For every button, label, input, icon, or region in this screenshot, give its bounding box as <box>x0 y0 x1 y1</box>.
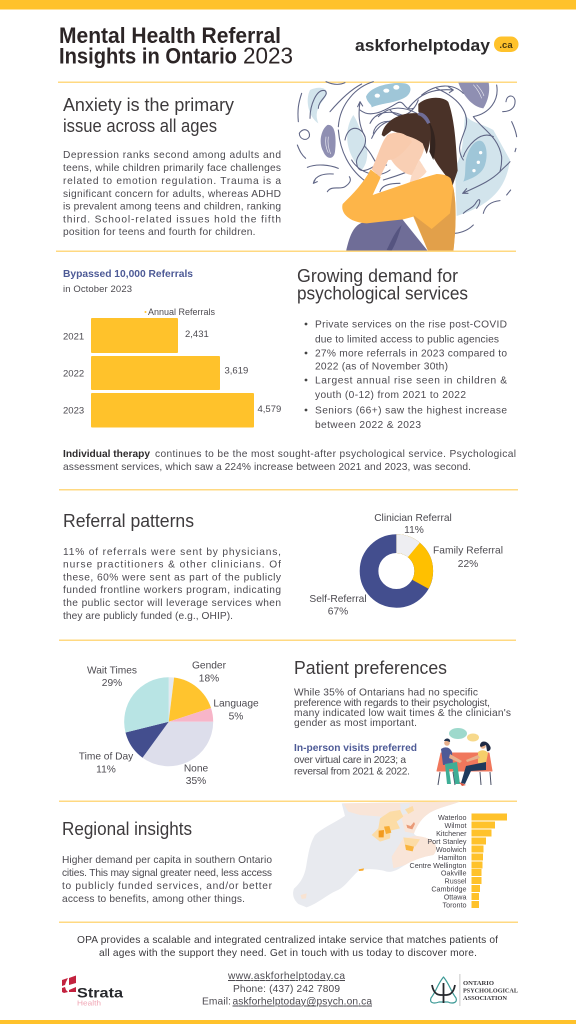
pie chart: None <box>184 764 209 774</box>
chart heading: in October 2023 <box>63 284 132 295</box>
footer call to action: OPA provides a scalable and integrated centralized intake service that matches patients of <box>77 935 498 946</box>
bullet list <box>305 320 507 431</box>
footer contact details <box>202 971 372 1008</box>
bar chart: top cities: Cambridge <box>431 884 467 894</box>
heading: patient preferences: Patient preferences <box>294 658 447 678</box>
pie chart: Language <box>213 698 259 710</box>
footer contact details: askforhelptoday@psych.on.ca <box>232 996 372 1008</box>
heading: growing demand <box>297 266 468 304</box>
heading: growing demand: psychological services <box>297 284 468 304</box>
text block: referral patterns description: the public sector will leverage services when <box>63 598 281 609</box>
bar chart: top cities: Waterloo <box>438 813 466 822</box>
footer contact details: Phone: (437) 242 7809 <box>233 984 340 995</box>
text block: regional insights description: to publicly funded services, and/or better <box>62 881 273 892</box>
bar chart: 3,619 <box>224 366 248 376</box>
icon: two people talking on a bench <box>437 728 492 786</box>
bullet list: Largest annual rise seen in children & <box>315 376 507 386</box>
footer call to action <box>77 935 498 959</box>
bar chart: top cities: Toronto <box>443 900 466 910</box>
bar chart: top cities: Russel <box>445 876 467 886</box>
bullet list: due to limited access to public agencies <box>315 334 499 346</box>
text block: referral patterns description <box>63 547 282 622</box>
bar chart: 2023 <box>63 406 84 416</box>
pie chart: Time of Day <box>79 752 134 762</box>
bar chart <box>63 307 281 428</box>
title <box>59 23 293 68</box>
pie chart: Gender <box>192 660 227 672</box>
pie chart: 11% <box>96 764 116 776</box>
bar chart: top cities: Ottawa <box>444 892 466 902</box>
text block: anxiety description: related to emotion regulation. Trauma is a <box>63 176 281 187</box>
panel: referral patterns <box>63 511 503 622</box>
text block: referral patterns description: funded frontline workers program, indicating <box>63 585 281 596</box>
text block: anxiety description: teens, while children primarily face challenges <box>63 163 281 174</box>
heading: anxiety <box>63 95 234 136</box>
pie chart: 29% <box>102 678 122 689</box>
text block: regional insights description: Higher demand per capita in southern Ontario <box>62 855 272 866</box>
text block: referral patterns description: they are publicly funded (e.g., OHIP). <box>63 611 233 622</box>
text block: anxiety description: significant concern for adults, whereas ADHD <box>63 189 281 200</box>
heading: growing demand: Growing demand for <box>297 266 458 286</box>
bar chart: 2022 <box>63 368 84 380</box>
text block: anxiety description: third. School-related issues hold the fifth <box>63 214 281 226</box>
bar chart: top cities <box>410 813 507 910</box>
text block: individual therapy <box>63 449 516 473</box>
text block: individual therapy: assessment services, which saw a 224% increase between 2021 and 2023, was second. <box>63 462 471 473</box>
callout: in-person visits: reversal from 2021 & 2022. <box>294 766 410 778</box>
callout: in-person visits: In-person visits preferred <box>294 743 417 754</box>
bar chart: top cities: Hamilton <box>438 853 466 862</box>
bullet list: between 2022 & 2023 <box>315 420 421 431</box>
footer contact details: Email: <box>202 996 231 1008</box>
bullet list: youth (0-12) from 2021 to 2022 <box>315 390 466 401</box>
pie chart <box>79 660 259 787</box>
top yellow band <box>0 0 576 10</box>
logo: Ontario Psychological Association: ASSOCIATION <box>463 995 507 1002</box>
chart heading: Bypassed 10,000 Referrals <box>63 269 193 280</box>
text block: anxiety description: position for teens and fourth for children. <box>63 227 256 238</box>
text block: referral patterns description: these, 60% were sent as part of the publicly <box>63 572 282 584</box>
bullet list: Private services on the rise post-COVID <box>315 320 507 330</box>
illustration: stressed woman <box>297 82 517 252</box>
text block: anxiety description: Depression ranks second among adults and <box>63 150 281 161</box>
text block: individual therapy: continues to be the most sought-after psychological service. Psychological <box>155 449 516 460</box>
bullet list: 27% more referrals in 2023 compared to <box>315 348 507 360</box>
donut chart: Clinician Referral <box>374 513 452 524</box>
footer contact details: www.askforhelptoday.ca <box>227 971 345 982</box>
bar chart: top cities: Oakville <box>441 868 466 878</box>
text block: referral patterns description: nurse practitioners & other clinicians. Of <box>63 560 281 570</box>
bar chart: top cities: Centre Wellington <box>410 861 467 870</box>
text block: referral patterns description: 11% of referrals were sent by physicians, <box>63 547 281 558</box>
bar chart: 4,579 <box>258 404 281 415</box>
bar chart: 2021 <box>63 332 84 342</box>
bar chart: top cities: Wilmot <box>445 821 466 830</box>
panel: referrals bar chart <box>63 269 281 428</box>
panel: regional insights <box>62 802 507 910</box>
donut chart: 11% <box>404 525 424 536</box>
footer call to action: all ages with the support they need. Get in touch with us today to discover more. <box>99 948 477 959</box>
heading: referral patterns: Referral patterns <box>63 511 194 531</box>
text block: patient preferences description: many indicated low wait times & the clinician's <box>294 708 511 719</box>
text block: regional insights description: access to benefits, among other things. <box>62 894 245 905</box>
bullet list: 2022 (as of November 30th) <box>315 362 448 372</box>
brand logo: askforhelptoday.ca: askforhelptoday <box>355 37 491 55</box>
bar chart: top cities: Port Stanley <box>427 837 467 846</box>
heading: regional insights: Regional insights <box>62 819 192 839</box>
donut chart: Family Referral <box>433 546 503 556</box>
text block: patient preferences description: gender as most important. <box>294 718 417 729</box>
logo: Strata Health <box>62 976 124 1008</box>
title: Mental Health Referral <box>59 23 281 48</box>
logo: Strata Health: Strata <box>77 986 124 1000</box>
heading: anxiety: issue across all ages <box>63 116 217 136</box>
panel: patient preferences <box>79 658 511 787</box>
title: 2023 <box>243 42 293 68</box>
text block: patient preferences description: preference with regards to their psychologist, <box>294 698 490 709</box>
logo: Strata Health: Health <box>77 1000 101 1008</box>
panel: anxiety <box>63 82 517 252</box>
pie chart: 18% <box>199 674 219 684</box>
map: southern Ontario <box>293 802 460 907</box>
pie chart: Wait Times <box>87 666 137 676</box>
callout: in-person visits: over virtual care in 2023; a <box>294 755 406 766</box>
text block: individual therapy: Individual therapy <box>63 449 150 460</box>
donut chart: 22% <box>458 559 478 570</box>
logo: Ontario Psychological Association <box>431 974 519 1006</box>
donut chart: 67% <box>328 606 348 618</box>
pie chart: 5% <box>229 712 243 722</box>
text block: anxiety description: is prevalent among teens and children, ranking <box>63 202 281 212</box>
bar chart: Annual Referrals <box>148 307 215 317</box>
callout: in-person visits <box>294 743 417 778</box>
donut chart <box>309 513 503 618</box>
brand logo: askforhelptoday.ca: .ca <box>499 40 513 51</box>
text block: anxiety description <box>63 150 281 238</box>
panel: growing demand <box>297 266 507 431</box>
heading: anxiety: Anxiety is the primary <box>63 95 234 115</box>
chart heading <box>63 269 193 295</box>
logo: Ontario Psychological Association: ONTARIO <box>463 980 494 987</box>
text block: regional insights description <box>62 855 273 905</box>
text block: regional insights description: cities. This may signal greater need, less access <box>62 868 272 879</box>
bar chart: 2,431 <box>185 329 209 340</box>
pie chart: 35% <box>186 776 206 787</box>
bar chart: top cities: Woolwich <box>436 845 467 854</box>
donut chart: Self-Referral <box>309 594 367 605</box>
title: Insights in Ontario <box>59 44 237 68</box>
bottom yellow band <box>0 1020 576 1024</box>
bar chart: top cities: Kitchener <box>436 829 467 838</box>
text block: patient preferences description: While 35% of Ontarians had no specific <box>294 688 478 698</box>
text block: patient preferences description <box>294 688 511 729</box>
bullet list: Seniors (66+) saw the highest increase <box>315 406 507 416</box>
logo: Ontario Psychological Association: PSYCHOLOGICAL <box>463 988 519 994</box>
